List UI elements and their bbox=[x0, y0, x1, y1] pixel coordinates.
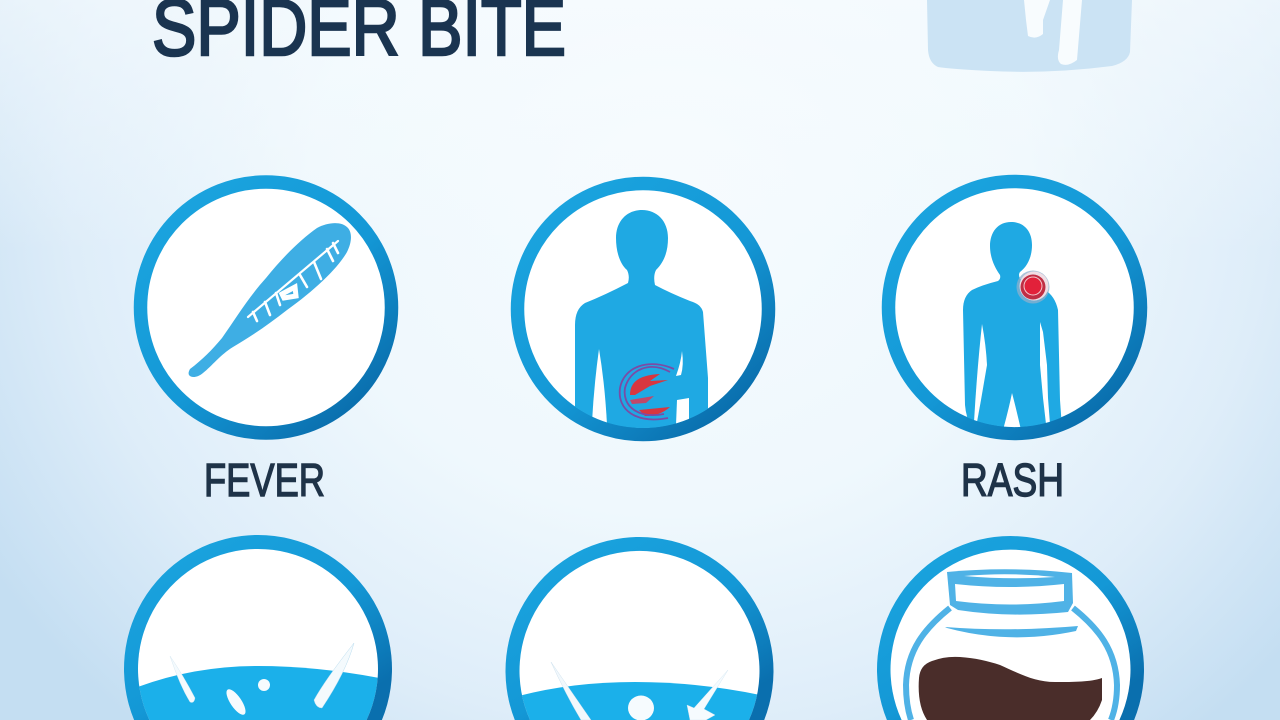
icon ring bbox=[877, 536, 1144, 720]
arm and leg gaps bbox=[974, 324, 987, 422]
water fill bbox=[130, 666, 390, 720]
label: rash: RASH bbox=[961, 454, 1064, 506]
dark liquid bbox=[919, 657, 1102, 720]
arm gaps bbox=[592, 349, 607, 425]
jar lid bbox=[947, 569, 1073, 615]
thermometer body bbox=[189, 223, 351, 377]
body silhouette bbox=[575, 210, 708, 430]
icon face bbox=[138, 549, 378, 720]
symptom: abdominal pain icon bbox=[518, 184, 768, 434]
white spikes and drops bbox=[170, 656, 195, 702]
label: fever: FEVER bbox=[204, 454, 325, 506]
jar shoulder highlight bbox=[945, 626, 1078, 637]
icon face bbox=[520, 551, 760, 720]
icon ring bbox=[505, 537, 774, 720]
jar body bbox=[906, 608, 1117, 720]
icon face bbox=[890, 550, 1130, 720]
symptom: lower left water icon bbox=[124, 535, 392, 720]
symptom: dark urine jar icon bbox=[877, 536, 1144, 720]
icon ring bbox=[124, 535, 392, 720]
thermometer scale markings bbox=[248, 241, 338, 321]
red pain area bbox=[630, 374, 668, 395]
white arrow bbox=[687, 670, 728, 720]
symptom: lower middle water icon bbox=[505, 537, 774, 720]
symptom: rash icon bbox=[888, 182, 1140, 434]
rash mark bbox=[1016, 270, 1050, 304]
water fill bbox=[515, 682, 765, 720]
body silhouette bbox=[963, 222, 1062, 428]
white spike bbox=[551, 662, 591, 720]
white drop bbox=[628, 696, 654, 720]
symptom: fever thermometer icon bbox=[140, 182, 392, 433]
icon: faded figure panel bbox=[927, 0, 1132, 72]
pain swirl bbox=[620, 364, 674, 419]
